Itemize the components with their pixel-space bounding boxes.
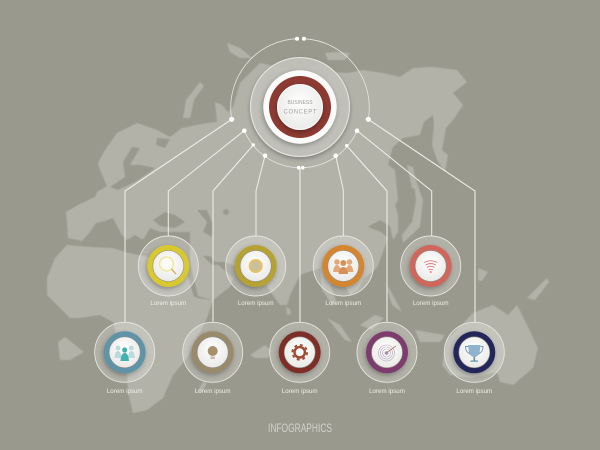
node 9: trophy: [444, 322, 504, 395]
node 2: gear circle: [226, 236, 286, 307]
label: Lorem ipsum: [195, 388, 231, 395]
label: Lorem ipsum: [325, 300, 361, 307]
icon: people: [333, 259, 354, 274]
map: islands: [58, 43, 549, 392]
label: Lorem ipsum: [282, 388, 318, 395]
central hub: business concept: [250, 58, 350, 156]
icon: light bulb: [208, 346, 218, 359]
orbit arcs: [231, 39, 369, 168]
hub label: BUSINESS: [288, 100, 313, 106]
connector dots: [229, 37, 371, 170]
label: Lorem ipsum: [107, 388, 143, 395]
node 3: team: [313, 236, 373, 307]
label: Lorem ipsum: [369, 388, 405, 395]
node 5: team teal: [95, 322, 155, 395]
map: Africa: [47, 245, 213, 413]
hub label: CONCEPT: [284, 110, 317, 116]
icon: magnifier: [160, 257, 176, 274]
node 4: wifi: [401, 236, 461, 307]
node 8: target: [357, 322, 417, 395]
map: Eurasia: [66, 62, 467, 306]
connector lines: [125, 119, 475, 322]
footer title: INFOGRAPHICS: [268, 421, 332, 435]
hub label: [284, 100, 317, 116]
node 1: search: [138, 236, 198, 307]
map: Australia: [442, 305, 538, 385]
label: Lorem ipsum: [238, 300, 274, 307]
label: Lorem ipsum: [456, 388, 492, 395]
node 7: gear: [270, 322, 330, 395]
icon: gear: [292, 345, 307, 360]
icon: people: [114, 346, 135, 361]
label: Lorem ipsum: [150, 300, 186, 307]
icon: target: [378, 345, 396, 361]
icon: trophy: [466, 345, 483, 362]
map: seas: [85, 138, 229, 297]
label: Lorem ipsum: [413, 300, 449, 307]
icon: wifi: [424, 261, 437, 273]
node 6: bulb: [183, 322, 243, 395]
world map: [47, 43, 549, 413]
icon: circle: [250, 260, 262, 272]
